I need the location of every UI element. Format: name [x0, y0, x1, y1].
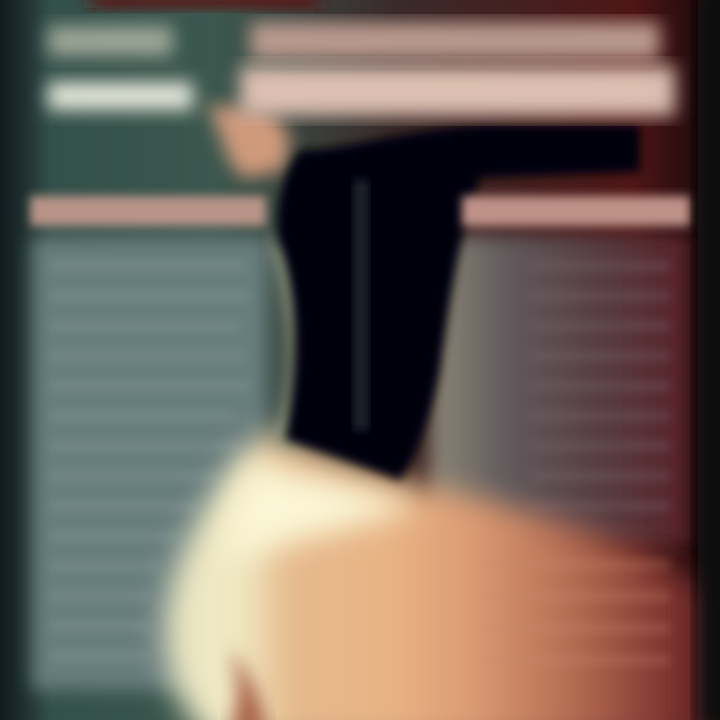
- lower right text block: [480, 560, 670, 665]
- title top red haze: [90, 0, 320, 8]
- bright cream highlight: [229, 465, 420, 560]
- central figure, abstract: [165, 105, 720, 720]
- dark garment: [277, 125, 640, 480]
- heading bar: right: [462, 196, 690, 226]
- panel: right column: [430, 236, 688, 546]
- right column text lines: [530, 262, 670, 510]
- lower form shadow: [228, 650, 268, 720]
- lower cream form: [165, 430, 720, 720]
- panel: left column: [32, 238, 268, 690]
- title top line: [48, 22, 660, 60]
- mid torso edge: [270, 240, 310, 450]
- title bottom line: [48, 66, 675, 116]
- left column text lines: [50, 262, 250, 660]
- heading bar: left: [30, 196, 266, 226]
- garment centre seam: [354, 180, 368, 430]
- title: [48, 0, 675, 116]
- right edge shade: [698, 0, 720, 720]
- neck warm shape: [205, 105, 290, 178]
